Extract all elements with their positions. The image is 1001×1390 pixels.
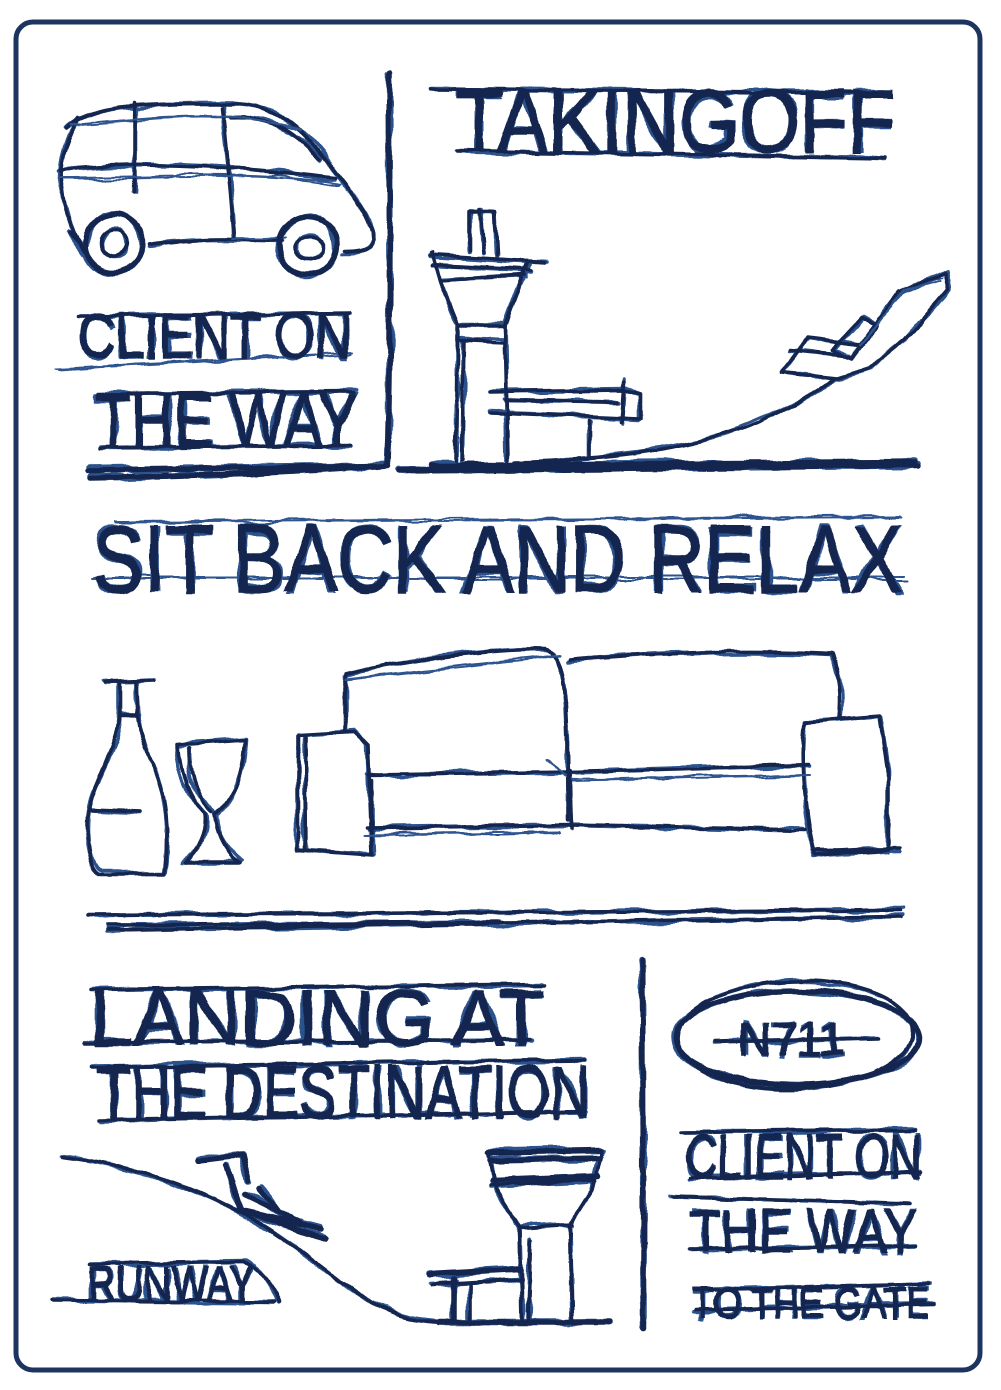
heading: client on the way to the gate: THE WAY: [690, 1198, 917, 1265]
panel: client on the way: [56, 74, 390, 478]
panel: sit back and relax: [88, 506, 905, 930]
icon: gate tower: [430, 1150, 610, 1322]
heading: landing at the destination: [85, 974, 590, 1134]
heading: client on the way: [56, 300, 358, 464]
heading: client on the way to the gate: TO THE GATE: [692, 1279, 930, 1328]
icon: wine bottle: [88, 680, 167, 874]
icon: flight number oval: N711: [738, 1013, 845, 1065]
heading: client on the way to the gate: [672, 1123, 935, 1328]
icon: wine glass: [178, 740, 245, 862]
divider: vertical and horizontal corner: [88, 74, 390, 478]
divider: vertical rule: [642, 960, 643, 1328]
label: runway: RUNWAY: [88, 1258, 255, 1311]
panel: taking off: [400, 71, 948, 470]
icon: sofa: [298, 650, 900, 855]
icon: car: [60, 104, 374, 275]
heading: landing at the destination: LANDING AT: [90, 974, 545, 1062]
icon: plane taking off: [515, 272, 948, 462]
icon: flight number oval: [675, 977, 919, 1093]
panel: client on the way to the gate: [642, 960, 935, 1328]
heading: client on the way: CLIENT ON: [78, 300, 352, 372]
panel: landing at the destination: [52, 974, 610, 1322]
heading: taking off: TAKINGOFF: [455, 71, 895, 171]
icon: plane landing: [198, 1155, 325, 1238]
heading: client on the way: THE WAY: [95, 379, 358, 464]
divider: horizontal rule: [88, 910, 900, 930]
heading: landing at the destination: THE DESTINATION: [97, 1051, 590, 1134]
icon: landing curve: [62, 1156, 450, 1322]
icon: control tower: [400, 210, 918, 470]
